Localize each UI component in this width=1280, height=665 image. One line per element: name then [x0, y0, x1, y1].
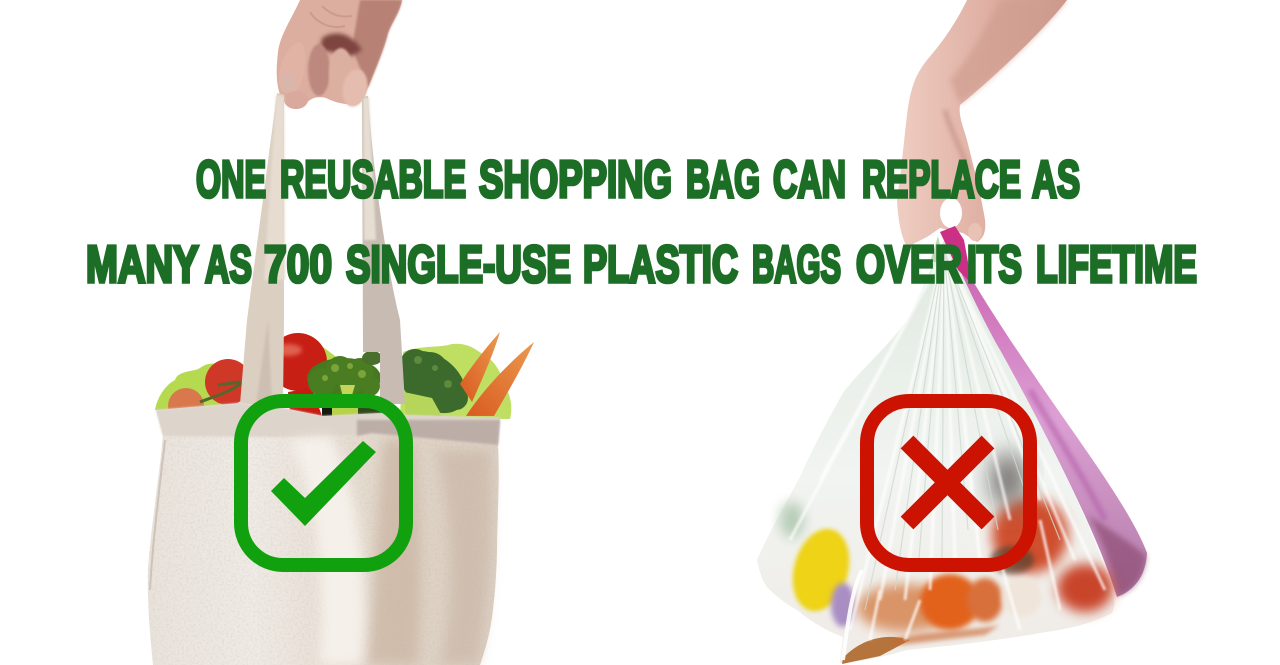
title line 2: 700: [264, 236, 332, 294]
title line 1: BAG: [686, 151, 760, 209]
tote handles: [240, 93, 405, 404]
title line 2: BAGS: [752, 236, 841, 294]
hand holding tote: [277, 0, 402, 109]
plastic folds: [790, 250, 1105, 640]
photo: reusable bag held by hand: [148, 0, 534, 665]
title line 2: OVER: [856, 236, 962, 294]
icon: green check mark in rounded square: [241, 401, 406, 565]
arm and hand: [897, 0, 1067, 247]
title line 2: MANY: [86, 236, 198, 294]
title line 1: ONE: [196, 151, 266, 209]
icon: red cross in rounded square: [867, 401, 1030, 565]
tote body: [148, 403, 500, 665]
white plastic bag: [757, 226, 1114, 664]
title line 2: AS: [205, 236, 252, 294]
title line 1: REPLACE: [862, 151, 1021, 209]
title line 2: SINGLE-USE: [346, 236, 571, 294]
title line 1: CAN: [773, 151, 846, 209]
title: [86, 151, 1197, 294]
title line 1: REUSABLE: [280, 151, 466, 209]
title line 1: AS: [1032, 151, 1080, 209]
title line 2: PLASTIC: [583, 236, 738, 294]
title line 1: SHOPPING: [479, 151, 672, 209]
title line 2: LIFETIME: [1036, 236, 1197, 294]
photo: plastic bag held by hand: [757, 0, 1147, 664]
vegetables: [155, 332, 534, 426]
bag contents: [784, 452, 1113, 664]
title line 2: ITS: [967, 236, 1022, 294]
pink bag behind: [945, 240, 1147, 597]
